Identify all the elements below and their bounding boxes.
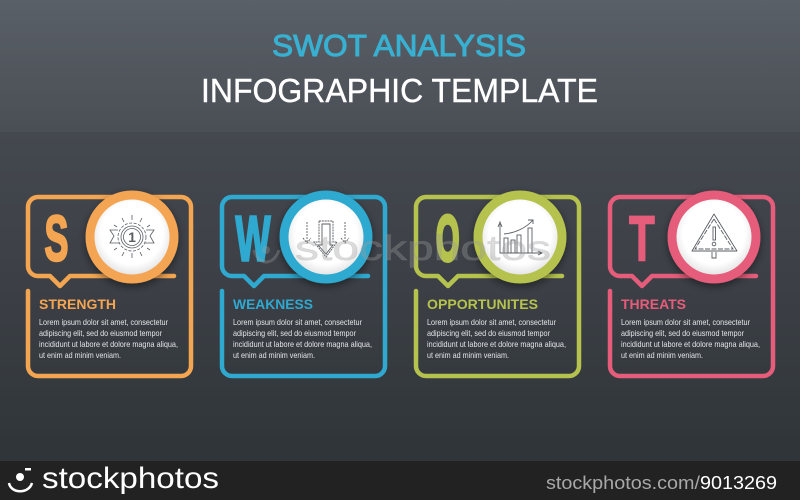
card outline: weakness	[222, 197, 385, 376]
body text: threats: Lorem ipsum dolor sit amet, consectetur	[621, 317, 750, 327]
title: INFOGRAPHIC TEMPLATE	[201, 72, 598, 109]
icon: down arrows	[280, 190, 372, 284]
body text: opportunities	[427, 317, 566, 360]
icon: logo	[9, 468, 32, 491]
body text: weakness: Lorem ipsum dolor sit amet, consectetur	[233, 317, 362, 327]
card outline: threats	[610, 197, 773, 376]
heading: opportunities: OPPORTUNITES	[427, 296, 538, 312]
body text: weakness: incididunt ut labore et dolore magna aliqua,	[233, 339, 372, 349]
panel: opportunities	[416, 190, 579, 376]
watermark: stockphotos	[295, 229, 551, 268]
heading: threats: THREATS	[621, 296, 686, 312]
footer brand: stockphotos	[42, 462, 219, 495]
body text: threats: incididunt ut labore et dolore magna aliqua,	[621, 339, 760, 349]
body text: weakness: ut enim ad minim veniam.	[233, 350, 315, 360]
body text: threats	[621, 317, 760, 360]
card outline: opportunities	[416, 197, 579, 376]
card outline: strength	[28, 197, 191, 376]
footer bar	[0, 461, 800, 500]
body text: opportunities: ut enim ad minim veniam.	[427, 350, 509, 360]
title	[201, 28, 598, 109]
footer id: stockphotos.com/ 9013269	[546, 473, 777, 493]
body text: opportunities: adipiscing elit, sed do eiusmod tempor	[427, 328, 550, 338]
body text: strength: Lorem ipsum dolor sit amet, consectetur	[39, 317, 168, 327]
panel: strength	[28, 190, 191, 376]
title: SWOT ANALYSIS	[272, 28, 526, 63]
letter T: T	[629, 204, 655, 275]
letter S: S	[44, 203, 68, 274]
body text: threats: adipiscing elit, sed do eiusmod tempor	[621, 328, 744, 338]
panel: weakness	[222, 190, 385, 376]
letter W: W	[236, 204, 271, 275]
body text: opportunities: Lorem ipsum dolor sit amet, consectetur	[427, 317, 556, 327]
heading: weakness: WEAKNESS	[233, 296, 313, 312]
panel: threats	[610, 190, 773, 376]
icon: medal: 1	[128, 229, 136, 245]
body text: weakness: adipiscing elit, sed do eiusmod tempor	[233, 328, 356, 338]
icon: medal	[86, 190, 178, 284]
watermark	[254, 229, 551, 268]
body text: threats: ut enim ad minim veniam.	[621, 350, 703, 360]
body text: strength: ut enim ad minim veniam.	[39, 350, 121, 360]
body text: strength	[39, 317, 178, 360]
body text: weakness	[233, 317, 372, 360]
heading: strength: STRENGTH	[39, 296, 116, 312]
body text: strength: incididunt ut labore et dolore magna aliqua,	[39, 339, 178, 349]
icon: growth chart	[474, 190, 566, 284]
body text: strength: adipiscing elit, sed do eiusmod tempor	[39, 328, 162, 338]
body text: opportunities: incididunt ut labore et dolore magna aliqua,	[427, 339, 566, 349]
letter O: O	[436, 203, 459, 275]
icon: warning triangle	[668, 190, 760, 284]
